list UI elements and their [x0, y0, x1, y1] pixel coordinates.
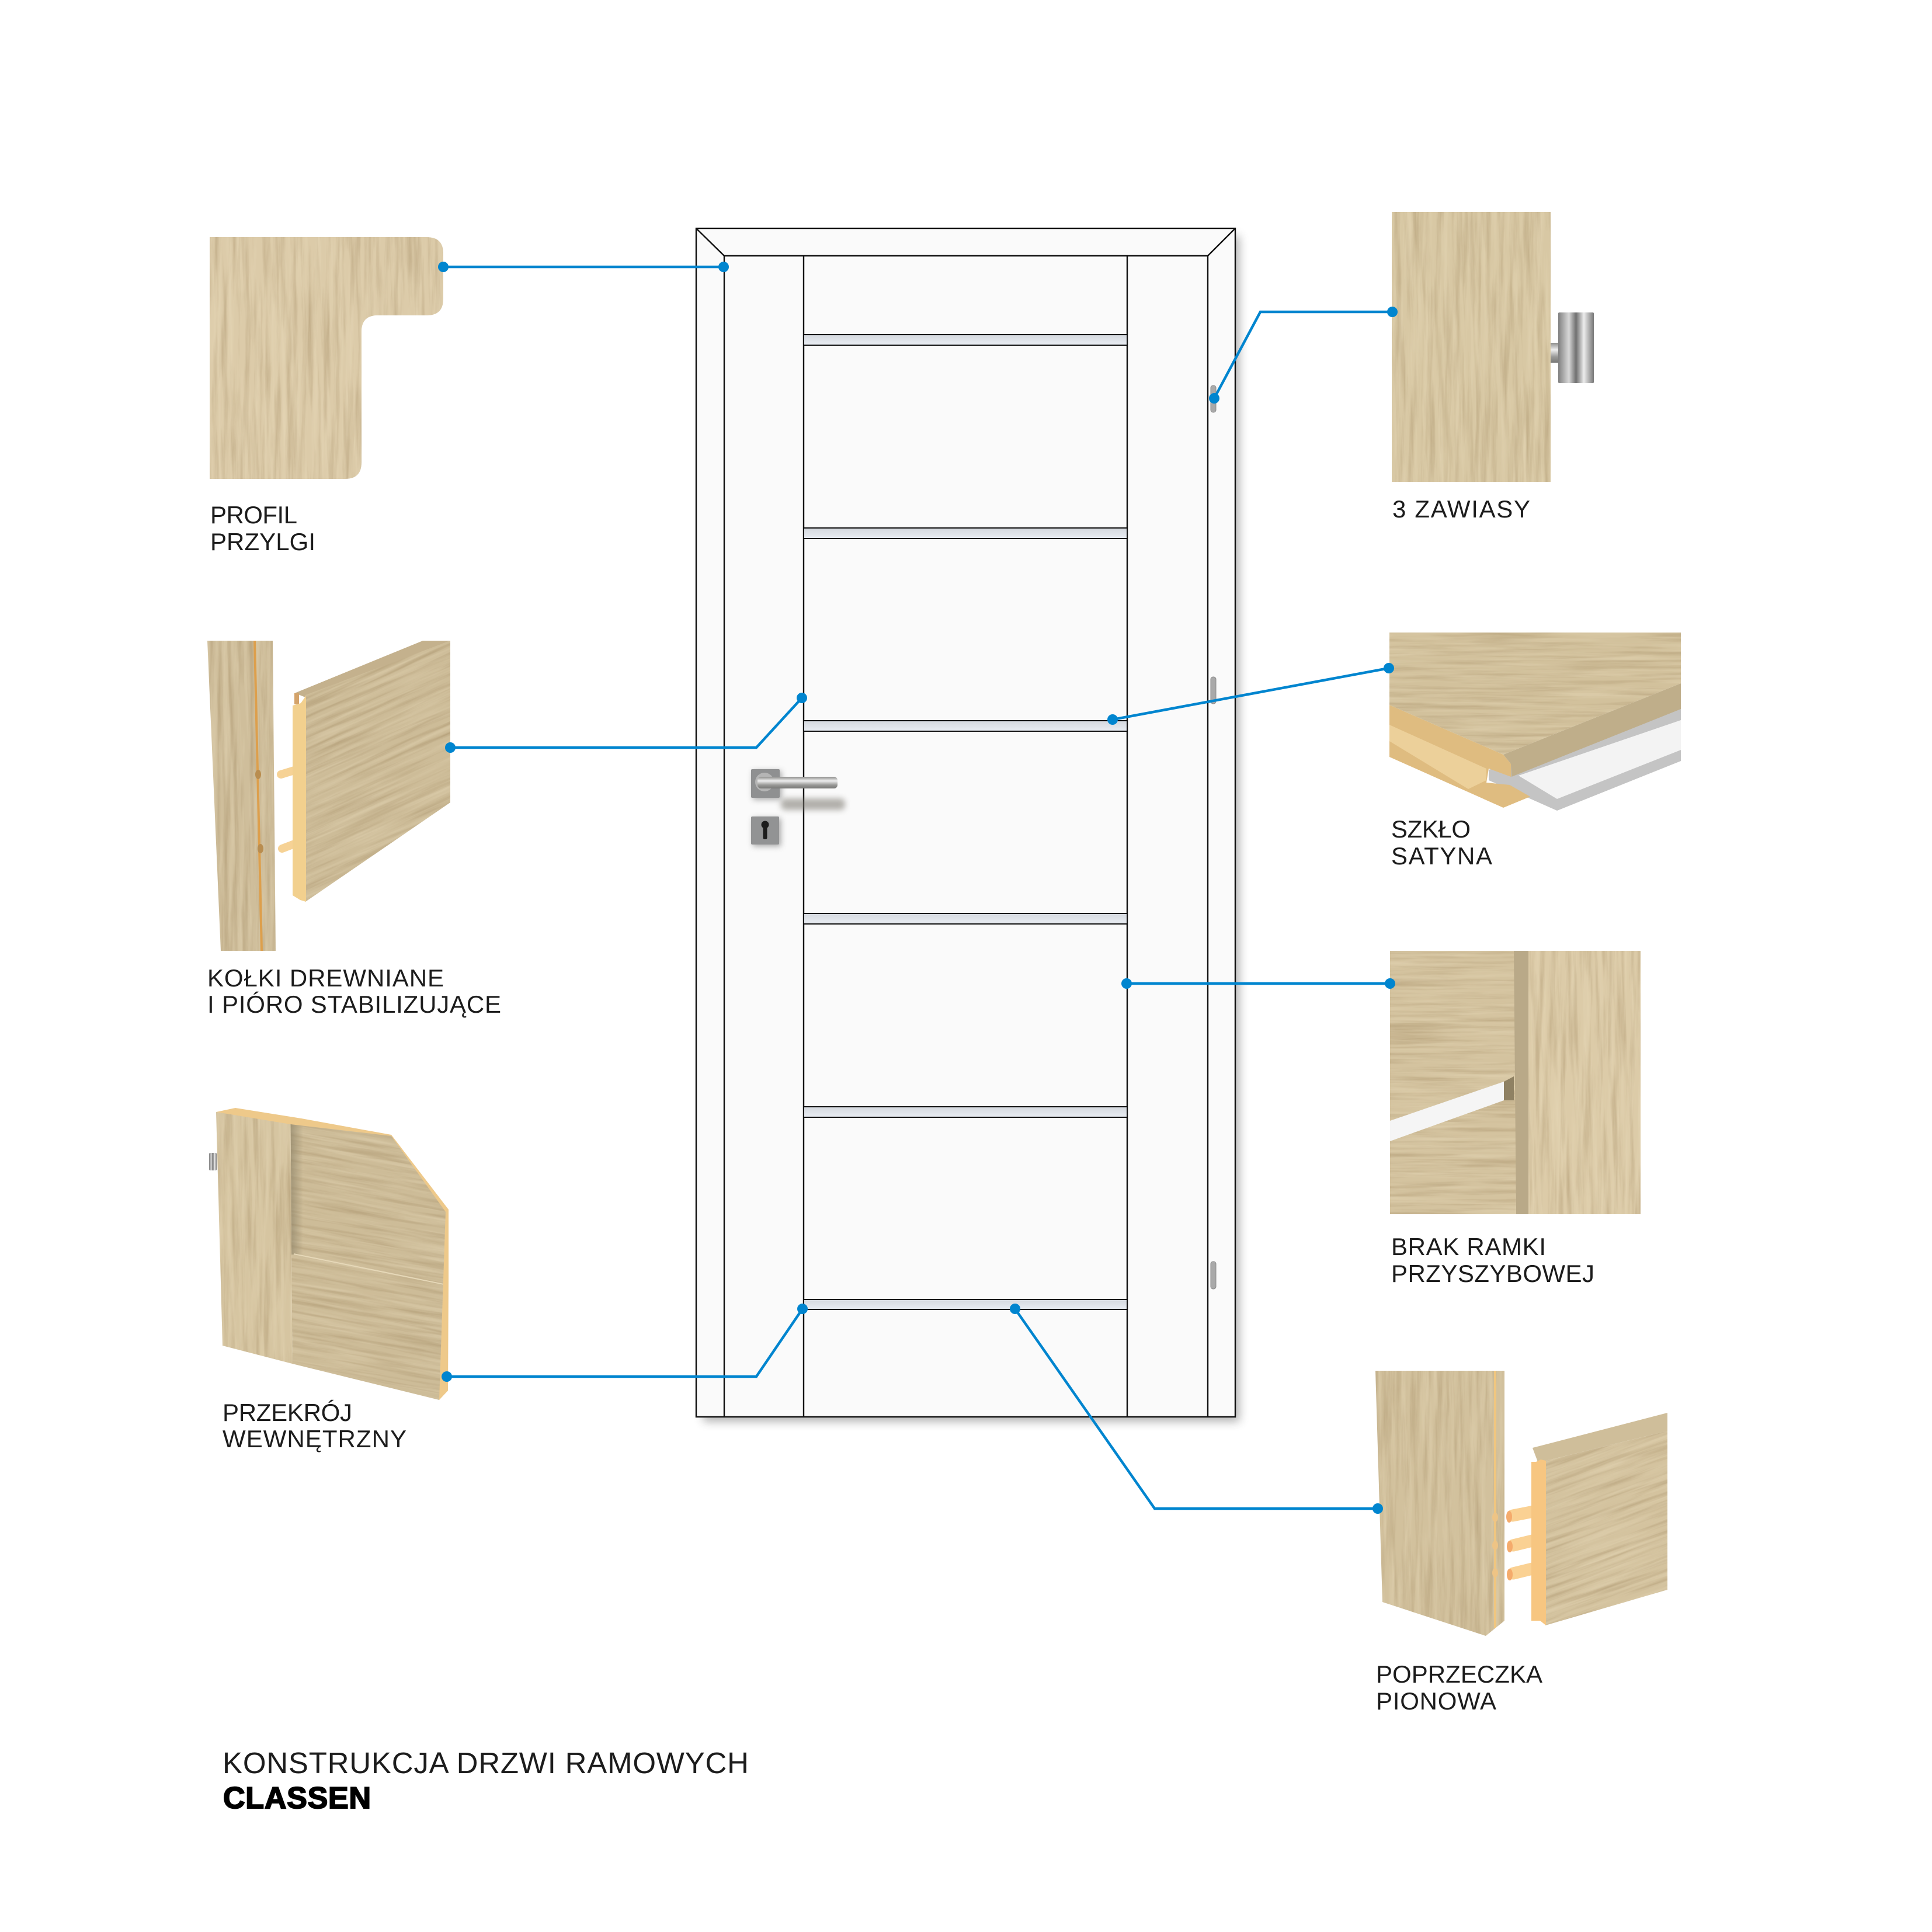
panel: kołki drewniane	[207, 641, 500, 1017]
right stile	[1526, 951, 1641, 1214]
connector: kołki	[445, 693, 807, 753]
label: kołki drewniane: I PIÓRO STABILIZUJĄCE	[207, 991, 501, 1018]
front edge	[1503, 683, 1681, 777]
connector: brak ramki	[1121, 978, 1395, 989]
hinge pin	[1551, 343, 1563, 363]
panel face	[305, 641, 450, 902]
MDF tongue	[1531, 1460, 1546, 1625]
panel: poprzeczka pionowa	[1367, 1301, 1818, 1760]
panel: door	[696, 228, 1239, 1422]
stile notches	[1492, 1513, 1498, 1577]
door shadow	[703, 236, 1239, 1422]
label: poprzeczka pionowa: POPRZECZKA	[1376, 1660, 1542, 1688]
glass pane	[1489, 709, 1681, 811]
subtitle: classen: CLASSEN	[223, 1781, 371, 1815]
glass white inner	[1519, 720, 1681, 799]
panel: 3 zawiasy	[1392, 212, 1594, 523]
rail faces	[1390, 951, 1516, 1214]
connector: poprzeczka	[1010, 1304, 1383, 1514]
label: szkło satyna: SATYNA	[1391, 842, 1492, 870]
glass strips	[804, 335, 1127, 1309]
panel top edge	[1533, 1413, 1667, 1462]
right section	[291, 1124, 446, 1400]
panel: brak ramki przyszybowej	[1390, 951, 1641, 1283]
MDF profile	[1389, 705, 1530, 808]
connector: zawiasy	[1209, 307, 1398, 404]
title line: KONSTRUKCJA DRZWI RAMOWYCH	[223, 1746, 749, 1780]
label: profil przylgi: PROFIL	[210, 501, 297, 529]
top face	[1389, 633, 1681, 755]
dowels	[281, 768, 302, 849]
door stile	[207, 641, 276, 951]
panel: przekrój wewnętrzny	[209, 1108, 449, 1452]
door frame and leaf	[696, 228, 1235, 1417]
label: przekrój: PRZEKRÓJ	[223, 1399, 352, 1426]
panel face	[1394, 1301, 1818, 1760]
connector: szkło	[1107, 663, 1394, 725]
label: profil przylgi: PRZYLGI	[210, 528, 315, 555]
stile notches	[255, 770, 263, 853]
label: 3 zawiasy: 3 ZAWIASY	[1392, 495, 1530, 523]
label: przekrój: WEWNĘTRZNY	[223, 1425, 406, 1453]
connector: profil	[438, 262, 729, 272]
connectors	[438, 262, 1398, 1514]
panel: szkło satyna	[1389, 633, 1681, 864]
door handle	[751, 769, 845, 810]
connector: przekrój	[442, 1304, 808, 1382]
label: szkło satyna: SZKŁO	[1391, 815, 1471, 843]
label: poprzeczka pionowa: PIONOWA	[1376, 1687, 1496, 1715]
panel: profil przylgi	[210, 237, 443, 555]
bevel	[1513, 951, 1528, 1214]
label: kołki drewniane: KOŁKI DREWNIANE	[207, 964, 444, 992]
glass slot	[1390, 1082, 1504, 1141]
MDF tongue	[293, 693, 306, 902]
stile section	[216, 1112, 292, 1364]
panel edge top	[294, 641, 450, 697]
hinge barrel	[1558, 312, 1594, 383]
wood sample	[1392, 212, 1551, 482]
MDF edges	[216, 1108, 449, 1400]
keyhole plate	[751, 816, 781, 846]
stile	[1367, 1367, 1507, 1641]
label: brak ramki: BRAK RAMKI	[1391, 1233, 1546, 1260]
dowel tips	[1506, 1511, 1513, 1580]
slot shadow	[1504, 1076, 1514, 1100]
dowels	[1513, 1510, 1540, 1573]
hinge stub	[209, 1153, 217, 1170]
door hinges	[1211, 385, 1216, 1289]
label: brak ramki: PRZYSZYBOWEJ	[1391, 1260, 1594, 1287]
MDF tongue	[1389, 725, 1486, 789]
wood profile shape	[210, 237, 443, 479]
title	[223, 1746, 749, 1815]
infographic canvas	[207, 212, 1681, 1809]
